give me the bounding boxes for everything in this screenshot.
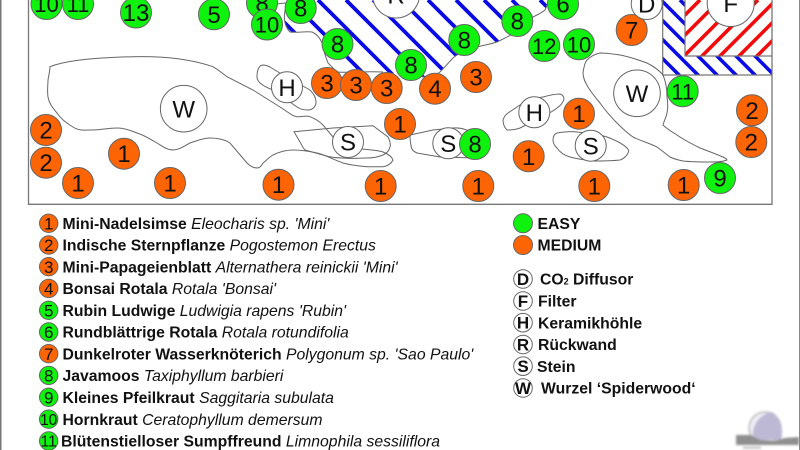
marker: 12: 12	[532, 34, 557, 59]
marker: 11	[667, 76, 698, 107]
marker: W	[160, 85, 207, 132]
marker: 3	[312, 68, 342, 98]
marker: W: W	[172, 96, 195, 124]
legend item 4: 4	[44, 280, 53, 298]
legend item 9: 9	[44, 388, 53, 407]
marker: H: H	[278, 75, 296, 102]
marker: 1	[365, 170, 396, 202]
marker: 12	[529, 30, 560, 62]
marker: D	[631, 0, 662, 20]
marker: 9: 9	[713, 166, 727, 192]
legend: objects	[514, 270, 696, 398]
watermark logo	[736, 412, 799, 448]
marker: 9	[704, 162, 736, 194]
marker: 10: 10	[255, 12, 279, 38]
legend: plant species	[40, 214, 474, 450]
outline: right root	[583, 53, 727, 162]
marker: 1	[668, 170, 699, 200]
marker: 8	[449, 24, 480, 56]
marker: S: S	[340, 130, 356, 157]
legend item 2: 2	[44, 236, 53, 255]
legend item 1: Mini-Nadelsimse Eleocharis sp. 'Mini'	[62, 216, 330, 233]
marker: S: S	[583, 133, 599, 160]
marker: 8: 8	[468, 132, 482, 158]
marker: 1	[513, 141, 544, 172]
legend item 10: Hornkraut Ceratophyllum demersum	[62, 412, 322, 429]
legend item 1: 1	[44, 214, 53, 233]
legend item 4: Bonsai Rotala Rotala 'Bonsai'	[62, 281, 277, 298]
marker: S	[575, 130, 606, 161]
marker: 5	[198, 0, 230, 30]
marker: W: W	[626, 81, 649, 108]
marker: 8	[460, 128, 490, 160]
marker: 2	[736, 126, 767, 158]
marker: 8	[396, 50, 426, 80]
legend: ceramic cave: Keramikhöhle	[538, 315, 642, 332]
outline: right stone	[553, 132, 629, 161]
marker: 2	[30, 114, 62, 146]
marker: 3: 3	[469, 64, 483, 92]
marker: 8: 8	[511, 8, 524, 36]
marker: 4	[420, 73, 450, 104]
legend: medium: MEDIUM	[538, 238, 601, 255]
legend item 8: Javamoos Taxiphyllum barbieri	[62, 368, 284, 385]
outline: middle stone	[410, 128, 475, 158]
marker: 3: 3	[380, 76, 393, 102]
marker: 7: 7	[625, 18, 638, 44]
marker: 2	[736, 95, 768, 126]
hatched area: back wall	[278, 0, 548, 78]
marker: 10	[564, 29, 594, 60]
legend: CO2 diffusor: CO2 Diffusor	[540, 272, 633, 289]
legend: difficulty	[514, 214, 601, 255]
marker: 3: 3	[349, 72, 363, 100]
marker: 1	[463, 170, 494, 202]
marker: 8: 8	[331, 32, 344, 58]
marker: 8	[502, 6, 533, 36]
marker: 8	[322, 28, 353, 60]
marker: 10	[31, 0, 62, 20]
marker: 1	[62, 168, 94, 198]
legend item 5: Rubin Ludwige Ludwigia rapens 'Rubin'	[62, 303, 347, 320]
marker: S	[332, 126, 364, 158]
marker: 1: 1	[117, 141, 131, 168]
marker: 2: 2	[745, 130, 758, 156]
marker: 1	[154, 168, 186, 198]
plant and object markers	[30, 0, 768, 202]
marker: 1	[564, 98, 594, 129]
hatched area: filter corner	[662, 0, 772, 76]
marker: S: S	[440, 131, 456, 158]
marker: 1: 1	[163, 170, 177, 198]
marker: 1: 1	[588, 174, 601, 200]
marker: 5: 5	[207, 2, 221, 29]
legend: back wall: R	[517, 336, 529, 354]
legend item 8: 8	[44, 366, 53, 386]
legend item 2: Indische Sternpflanze Pogostemon Erectus	[62, 238, 376, 255]
legend item 10: 10	[40, 412, 58, 429]
legend item 5: 5	[44, 301, 53, 320]
legend: CO2 diffusor: D	[517, 270, 529, 289]
marker: 1: 1	[472, 174, 485, 200]
marker: 1: 1	[393, 112, 407, 138]
marker: F	[707, 0, 754, 26]
marker: 1: 1	[572, 101, 586, 128]
outline: left stone	[294, 126, 390, 158]
marker: 1	[263, 169, 294, 200]
marker: 3	[371, 72, 402, 104]
marker: 2: 2	[39, 118, 53, 144]
legend: ceramic cave: H	[517, 314, 529, 333]
legend: filter: F	[518, 292, 528, 311]
marker: 3	[460, 62, 492, 92]
marker: 13: 13	[123, 0, 149, 27]
legend: back wall	[514, 335, 617, 354]
marker: 8: 8	[404, 52, 418, 80]
legend item 3: 3	[44, 258, 53, 277]
legend item 7: 7	[44, 345, 53, 364]
marker: 1: 1	[374, 174, 387, 200]
marker: 2	[30, 147, 62, 178]
panel: tank plan	[28, 0, 800, 204]
marker: 1: 1	[677, 172, 690, 200]
marker: H	[272, 72, 302, 103]
legend: root: W	[515, 379, 532, 398]
marker: 4: 4	[428, 76, 442, 103]
marker: W	[614, 70, 660, 117]
marker: 7	[616, 14, 647, 46]
legend item 9: Kleines Pfeilkraut Saggitaria subulata	[62, 390, 334, 407]
marker: 1	[108, 138, 140, 169]
legend item 6: Rundblättrige Rotala Rotala rotundifolia	[62, 325, 349, 342]
outline: left cave	[257, 65, 316, 110]
legend item 7: Dunkelroter Wasserknöterich Polygonum sp. 'Sao Paulo'	[62, 346, 474, 363]
marker: 3	[340, 70, 372, 100]
marker: 8: 8	[458, 28, 471, 54]
marker: 8	[285, 0, 316, 24]
marker: 10	[252, 9, 282, 40]
marker: H	[519, 97, 550, 128]
legend: filter	[514, 292, 577, 311]
marker: 6	[548, 0, 578, 20]
legend: filter: Filter	[538, 294, 577, 311]
marker: 1: 1	[522, 144, 535, 171]
legend: stone: S	[517, 357, 529, 376]
marker: 1	[384, 108, 416, 140]
tank border	[28, 0, 772, 204]
marker: H: H	[526, 100, 543, 127]
legend item 3: Mini-Papageienblatt Alternathera reinickii 'Mini'	[62, 259, 399, 276]
marker: 11: 11	[671, 79, 694, 104]
legend: stone: Stein	[537, 359, 576, 376]
marker: 10: 10	[567, 32, 591, 57]
legend: stone	[514, 357, 576, 376]
marker: 2: 2	[39, 150, 53, 177]
marker: 3: 3	[320, 70, 334, 98]
legend: easy: EASY	[538, 216, 581, 233]
outline: large root	[48, 57, 393, 168]
legend item 6: 6	[44, 323, 53, 342]
marker: S	[433, 128, 464, 159]
legend: back wall: Rückwand	[538, 337, 617, 354]
marker: 11	[62, 0, 94, 20]
outline: right cave	[503, 94, 564, 130]
marker: 8	[246, 0, 278, 18]
marker: 1: 1	[272, 172, 285, 199]
marker: 1	[579, 170, 610, 202]
legend: CO2 diffusor	[514, 270, 633, 289]
marker: 1: 1	[71, 170, 85, 198]
marker: 2: 2	[745, 98, 759, 125]
marker: R	[372, 0, 420, 18]
legend: root: Wurzel ‘Spiderwood‘	[541, 381, 696, 398]
